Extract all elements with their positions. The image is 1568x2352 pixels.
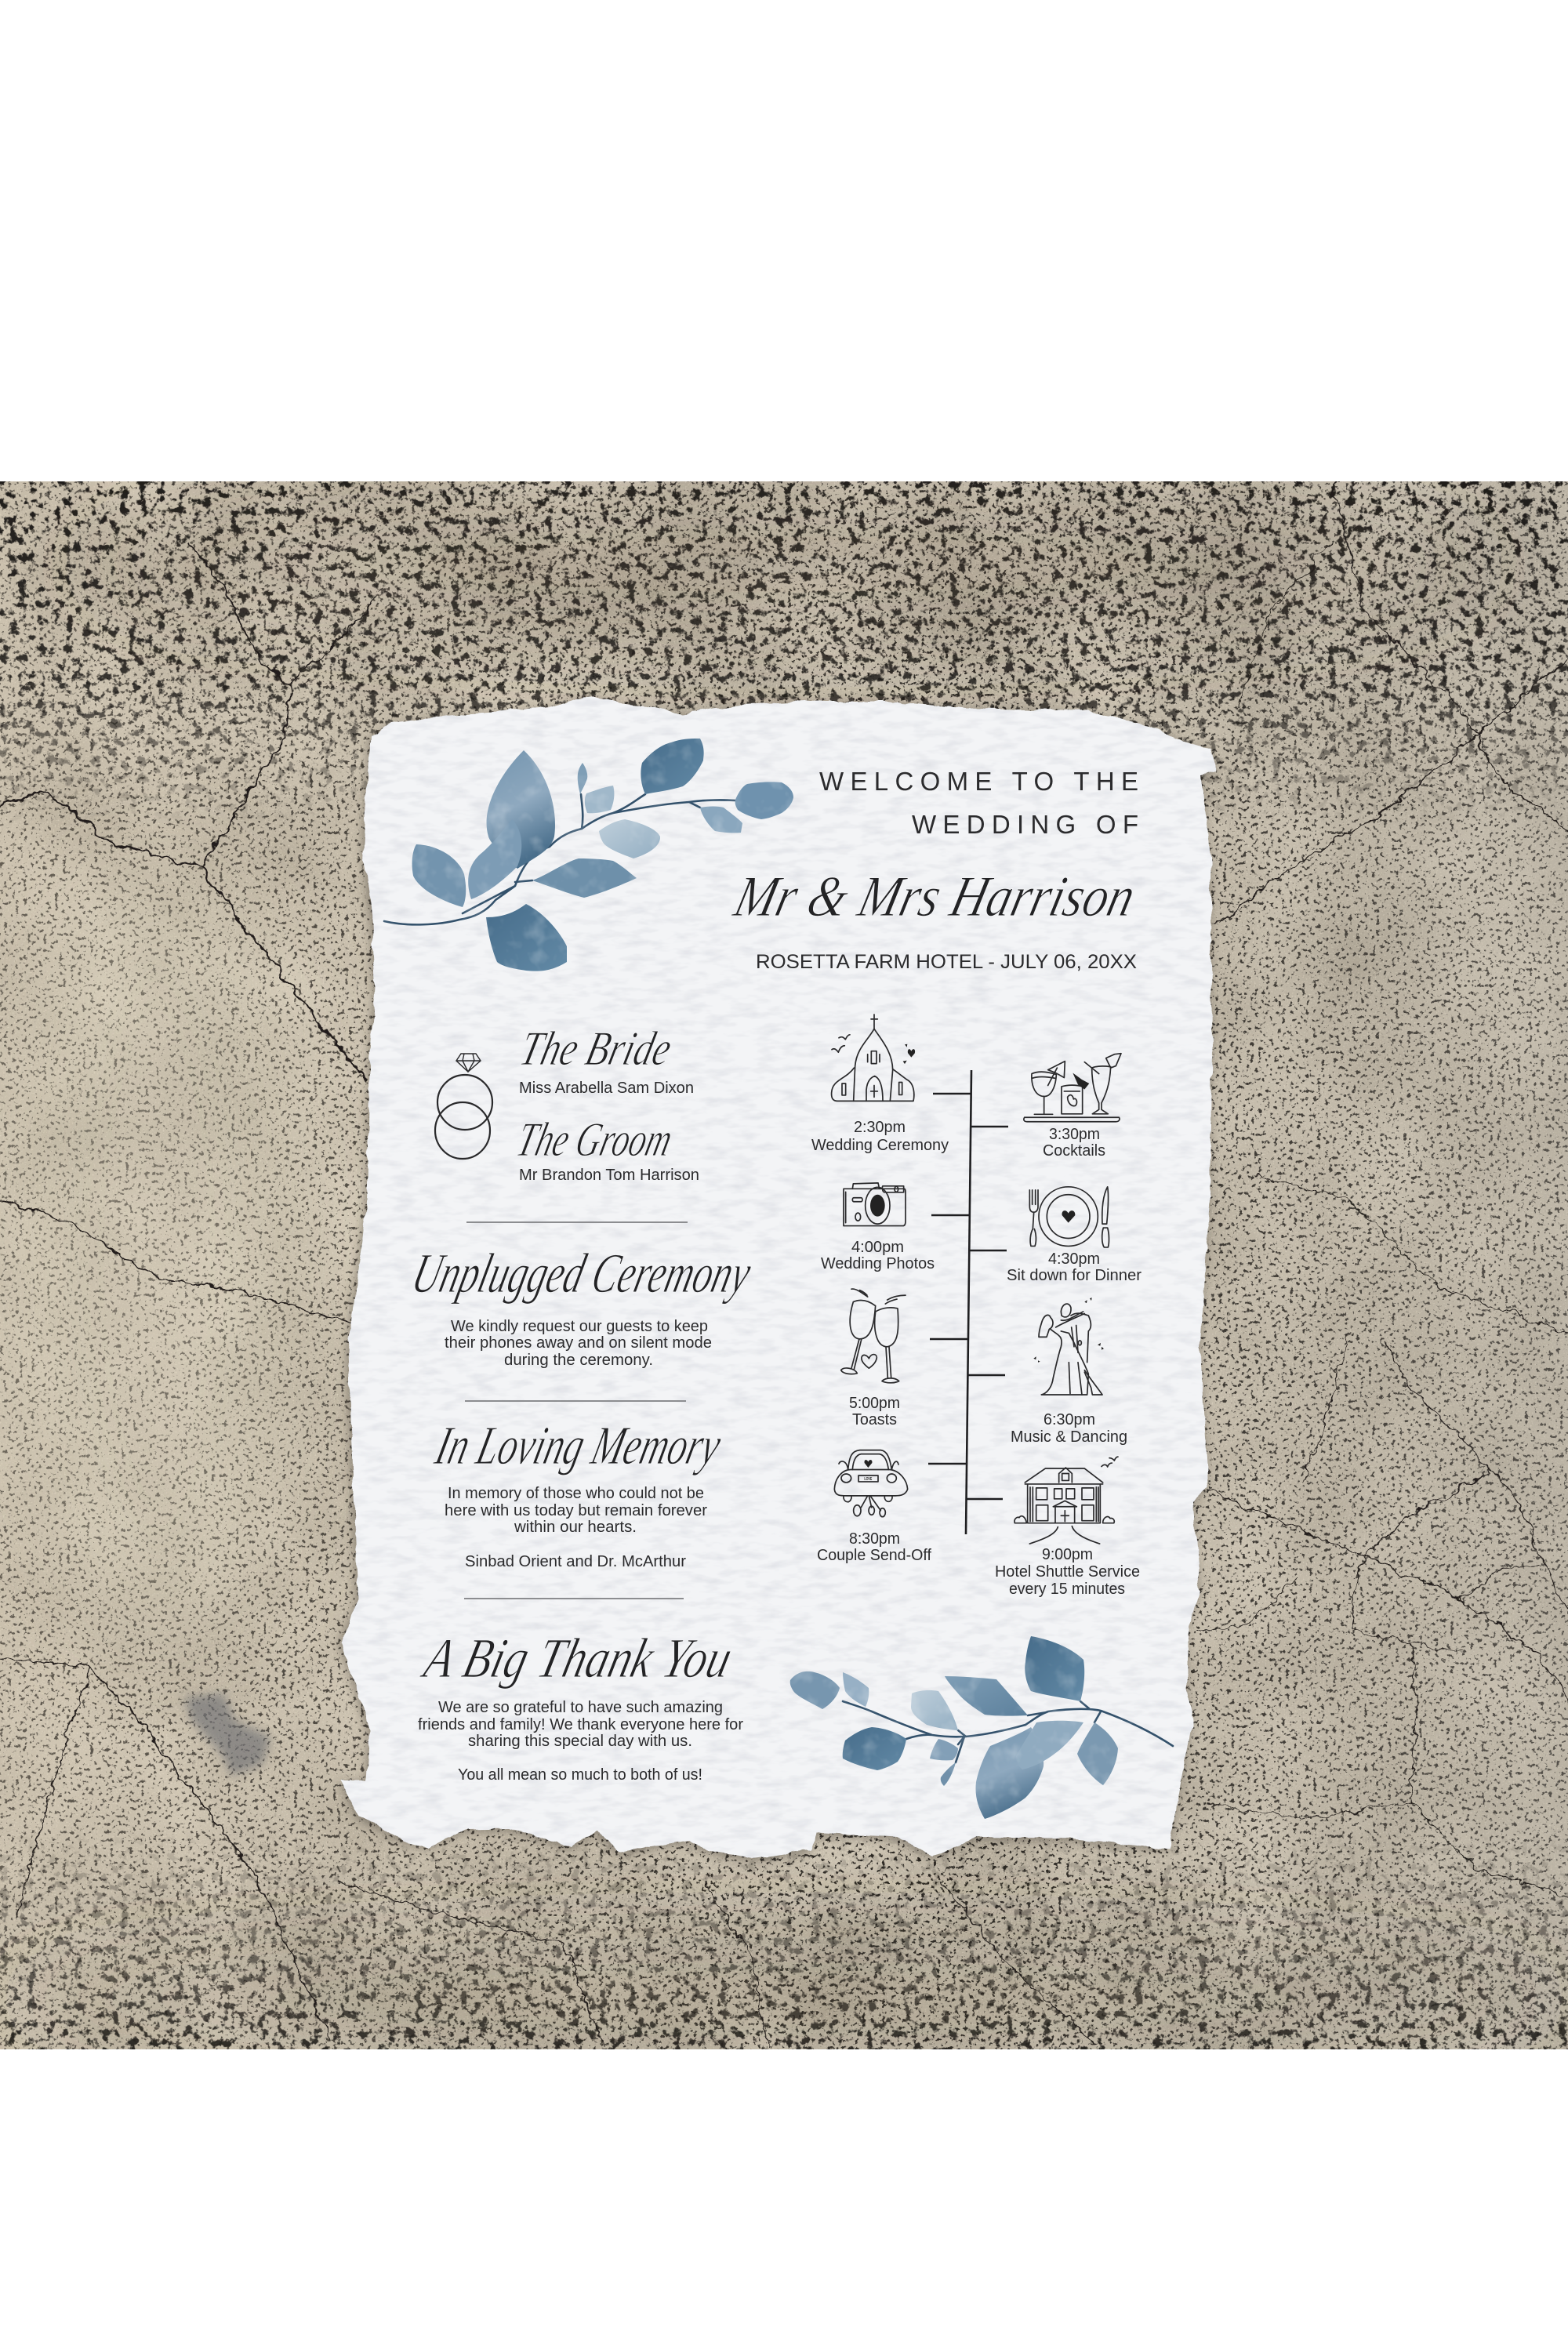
heading: Unplugged Ceremony — [406, 1242, 757, 1305]
small round leaf — [790, 1671, 840, 1709]
eucalyptus branch: bottom right — [790, 1636, 1173, 1819]
timeline icons — [832, 1014, 1121, 1544]
couple send-off: 8:30pm — [849, 1530, 900, 1548]
hotel shuttle: Hotel Shuttle Service — [995, 1563, 1140, 1581]
toasts: Toasts — [852, 1411, 897, 1428]
stem — [384, 794, 735, 924]
body text: Sinbad Orient and Dr. McArthur — [465, 1553, 686, 1570]
body text: You all mean so much to both of us! — [458, 1766, 702, 1784]
body text — [445, 1318, 712, 1369]
welcome line 2: WEDDING OF — [912, 810, 1138, 839]
deckled paper sheet — [341, 695, 1217, 1858]
body text: within our hearts. — [514, 1519, 637, 1536]
big leaf — [487, 750, 555, 869]
cocktails — [1043, 1126, 1105, 1160]
dense speckle regions — [0, 481, 1568, 2049]
lower leaf — [486, 904, 567, 971]
body text: their phones away and on silent mode — [445, 1334, 712, 1352]
body text: In memory of those who could not be — [448, 1485, 704, 1502]
tonal shading — [0, 494, 1568, 2062]
body text: here with us today but remain forever — [445, 1502, 707, 1519]
cracks — [0, 481, 1568, 2046]
top dark leaf — [641, 739, 704, 794]
cocktails: Cocktails — [1043, 1142, 1105, 1160]
dinner: 4:30pm — [1048, 1250, 1100, 1268]
timeline axis — [928, 1070, 1008, 1534]
music and dancing — [1011, 1411, 1127, 1446]
concrete photo background — [0, 481, 1568, 2062]
heading: A Big Thank You — [416, 1627, 739, 1690]
icon: send-off car — [834, 1450, 908, 1517]
body text: during the ceremony. — [504, 1352, 653, 1369]
wedding ceremony — [811, 1119, 949, 1154]
icon: cocktails — [1024, 1054, 1121, 1122]
welcome line 1: WELCOME TO THE — [819, 767, 1138, 796]
music and dancing: Music & Dancing — [1011, 1428, 1127, 1446]
body text — [418, 1699, 743, 1784]
small leaf — [930, 1739, 958, 1760]
small right leaf — [700, 806, 742, 833]
hotel shuttle: every 15 minutes — [1009, 1581, 1125, 1598]
toasts: 5:00pm — [849, 1395, 900, 1412]
body text: We are so grateful to have such amazing — [438, 1699, 723, 1716]
top dark leaf — [1025, 1636, 1084, 1701]
wedding photos: 4:00pm — [851, 1239, 904, 1256]
icon: champagne toast — [841, 1289, 906, 1383]
eucalyptus branch: top left — [384, 739, 793, 971]
body text — [445, 1485, 707, 1570]
right leaf — [1077, 1722, 1118, 1785]
dinner — [1007, 1250, 1142, 1284]
groom name: Mr Brandon Tom Harrison — [519, 1167, 699, 1184]
icon: wedding rings — [435, 1054, 492, 1159]
bride name: Miss Arabella Sam Dixon — [519, 1080, 694, 1097]
paper shadow — [339, 698, 1215, 1860]
cocktails: 3:30pm — [1049, 1126, 1100, 1143]
stem — [843, 1701, 1173, 1762]
panel: unplugged ceremony — [406, 1242, 757, 1369]
icon: church — [832, 1014, 915, 1101]
icon: hotel — [1014, 1457, 1118, 1544]
pale leaf — [911, 1690, 958, 1730]
slim leaf — [578, 763, 587, 794]
round right leaf — [735, 782, 793, 819]
panel: bride and groom — [512, 1022, 699, 1184]
grey stain — [184, 1693, 270, 1776]
heading: In Loving Memory — [429, 1416, 728, 1476]
wedding photos — [821, 1239, 935, 1272]
small leaf — [585, 786, 614, 813]
middle leaf — [532, 858, 637, 898]
dark round leaf — [843, 1727, 906, 1770]
overlap leaf — [1016, 1721, 1083, 1769]
the groom heading: The Groom — [512, 1112, 678, 1167]
venue and date: ROSETTA FARM HOTEL - JULY 06, 20XX — [756, 951, 1137, 973]
icon: dancing couple — [1033, 1298, 1104, 1395]
dinner: Sit down for Dinner — [1007, 1267, 1142, 1284]
toasts — [849, 1395, 900, 1428]
hotel shuttle — [995, 1546, 1140, 1598]
couple name script: Mr & Mrs Harrison — [728, 865, 1142, 929]
panel: in loving memory — [429, 1416, 728, 1570]
big leaf — [975, 1727, 1044, 1819]
wedding ceremony: 2:30pm — [854, 1119, 906, 1136]
panel: a big thank you — [416, 1627, 743, 1784]
wedding ceremony: Wedding Ceremony — [811, 1137, 949, 1154]
left leaf — [412, 844, 466, 907]
music and dancing: 6:30pm — [1044, 1411, 1095, 1428]
body text: sharing this special day with us. — [468, 1733, 692, 1750]
sliver leaf — [941, 1762, 956, 1786]
body text: friends and family! We thank everyone here for — [418, 1716, 743, 1733]
upper mid leaf — [945, 1676, 1028, 1716]
tonal wash — [0, 481, 1568, 2049]
couple send-off: Couple Send-Off — [817, 1547, 931, 1564]
couple send-off — [817, 1530, 931, 1564]
icon: send-off car: LOVE — [864, 1476, 872, 1481]
hotel shuttle: 9:00pm — [1042, 1546, 1093, 1563]
wedding photos: Wedding Photos — [821, 1255, 935, 1272]
timeline labels — [811, 1119, 1142, 1598]
body text: We kindly request our guests to keep — [451, 1318, 708, 1335]
icon: plate and cutlery — [1029, 1187, 1109, 1247]
small slim leaf — [843, 1672, 869, 1707]
the bride heading: The Bride — [515, 1022, 677, 1076]
pale leaf — [599, 819, 660, 858]
overlap leaf — [468, 819, 521, 899]
icon: camera — [844, 1183, 906, 1226]
welcome heading — [819, 767, 1138, 839]
